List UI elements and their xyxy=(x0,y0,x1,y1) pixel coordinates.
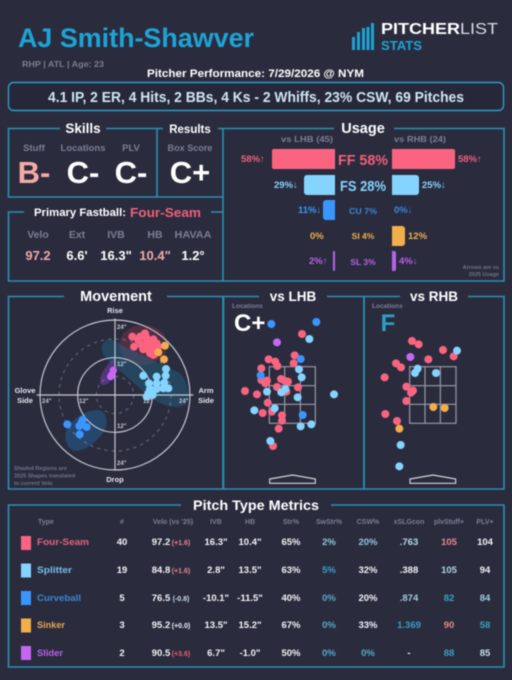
heading: skills: Skills xyxy=(65,121,101,136)
usage row: splitter: 25%↓ xyxy=(422,180,446,191)
row: curveball: 40% xyxy=(281,593,301,604)
row: curveball: 0% xyxy=(322,593,336,604)
sinker dots xyxy=(154,342,169,363)
usage row: four-seam: 58%↑ xyxy=(458,154,482,165)
label: box score grade: Box Score xyxy=(168,143,212,154)
row: sinker: 58 xyxy=(480,620,490,631)
distance tick labels: 12" xyxy=(143,399,153,405)
four-seam locations xyxy=(381,337,458,425)
row: sinker: 33% xyxy=(358,620,378,631)
axis labels xyxy=(15,306,214,484)
row: sinker: 90 xyxy=(444,620,454,631)
usage row: sinker: 0% xyxy=(310,231,324,242)
label: box score grade: C+ xyxy=(170,155,210,190)
row: four-seam: 97.2 xyxy=(152,537,170,548)
note: shaded regions: to current Velo xyxy=(14,481,53,487)
table header: SwStr% xyxy=(316,519,343,526)
label: box score grade xyxy=(168,143,212,190)
row: splitter: 13.5" xyxy=(238,565,262,576)
panel: usage xyxy=(223,121,504,281)
row: four-seam: (+1.6) xyxy=(172,540,190,547)
table header: xSLGcon xyxy=(394,519,424,526)
fastball metric values: 1.2° xyxy=(181,248,205,263)
distance tick labels: 12" xyxy=(117,362,127,368)
axis labels: Arm xyxy=(198,386,214,395)
row: sinker: 15.2" xyxy=(238,620,262,631)
panel: vs RHB locations xyxy=(364,289,504,489)
panel: stat line xyxy=(8,82,504,110)
row: curveball: -10.1" xyxy=(203,593,229,604)
heading: primary fastball xyxy=(34,206,201,220)
usage row: curveball xyxy=(298,200,412,220)
logo: Pitcher List Stats: LIST xyxy=(460,21,499,38)
fastball metric values: 97.2 xyxy=(25,248,51,263)
row: splitter: 84.8 xyxy=(152,565,170,576)
row: curveball: 20% xyxy=(358,593,378,604)
logo: Pitcher List Stats: PITCHER xyxy=(381,21,460,38)
pitcher details: RHP | ATL | Age: 23 xyxy=(22,59,104,69)
row: slider: 2 xyxy=(119,648,125,659)
splitter dots xyxy=(139,365,172,401)
row: splitter: 2.8" xyxy=(207,565,225,576)
distance tick labels: 12" xyxy=(79,399,89,405)
axis labels: Side xyxy=(17,396,33,405)
row: sinker: 0% xyxy=(322,620,336,631)
row: slider: Slider xyxy=(37,648,63,659)
row: slider: - xyxy=(407,648,411,659)
row: four-seam: .763 xyxy=(400,537,418,548)
distance tick labels: 24" xyxy=(117,461,127,467)
note: arrows explanation: Arrows are vs xyxy=(463,265,499,271)
four-seam dots xyxy=(128,329,162,359)
movement chart xyxy=(37,318,193,470)
row: sinker: 1.369 xyxy=(397,620,421,631)
row: curveball: 5 xyxy=(119,593,125,604)
chart rings and axes xyxy=(37,318,193,470)
axis labels: Drop xyxy=(106,475,124,484)
shaded regions xyxy=(65,325,189,451)
heading: game line: Pitcher Performance: 7/29/2026 @ NYM xyxy=(147,68,364,80)
usage row: splitter: 29%↓ xyxy=(274,180,298,191)
table header: # xyxy=(120,519,124,526)
curveball locations xyxy=(257,318,320,419)
row: slider: 88 xyxy=(444,648,454,659)
fastball metric labels: IVB xyxy=(107,229,125,241)
label: PLV grade: C- xyxy=(115,155,147,190)
home plate xyxy=(410,475,456,483)
row: curveball: 76.5 xyxy=(152,593,171,604)
row: sinker: (+0.0) xyxy=(172,623,190,630)
label: stuff grade: B- xyxy=(18,155,50,190)
table header xyxy=(38,519,494,526)
row: sinker: 95.2 xyxy=(152,620,170,631)
heading: vs LHB: vs LHB xyxy=(270,289,317,304)
row: curveball: 82 xyxy=(444,593,454,604)
usage row: curveball: 11%↓ xyxy=(298,205,321,216)
row: sinker: 67% xyxy=(281,620,301,631)
row: curveball: 84 xyxy=(480,593,491,604)
row: splitter: 32% xyxy=(358,565,378,576)
fastball metric labels xyxy=(27,229,212,241)
table header: Velo (vs '25) xyxy=(153,519,193,526)
fastball metric labels: Velo xyxy=(27,229,49,241)
slider location xyxy=(406,353,414,361)
usage row: curveball: 0%↓ xyxy=(394,205,412,216)
note: arrows explanation xyxy=(463,265,499,278)
row: sinker: 3 xyxy=(119,620,125,631)
row: splitter: Splitter xyxy=(37,565,72,576)
table header: Str% xyxy=(283,519,300,526)
row: four-seam: 20% xyxy=(358,537,378,548)
usage row: slider: 2%↑ xyxy=(309,256,327,267)
axis labels: Side xyxy=(198,396,214,405)
strike zone grid xyxy=(410,367,456,423)
note: shaded regions xyxy=(14,466,75,487)
distance tick labels: 24" xyxy=(179,399,189,405)
axis labels: Glove xyxy=(15,386,35,395)
locations label: Locations xyxy=(372,303,403,310)
locations grade: C+ xyxy=(234,310,265,337)
panel: primary fastball xyxy=(8,206,223,281)
fastball metric values: 10.4" xyxy=(139,248,171,263)
note: shaded regions: 2025 Shapes translated xyxy=(14,474,75,480)
panel: vs LHB locations xyxy=(224,289,364,489)
heading: usage: Usage xyxy=(341,121,385,137)
row: slider: 0% xyxy=(322,648,336,659)
row: slider: 50% xyxy=(281,648,301,659)
usage row: curveball: CU 7% xyxy=(349,206,377,216)
panel: movement xyxy=(8,289,223,489)
heading: results: Results xyxy=(169,124,211,136)
strike zone plot xyxy=(241,318,338,483)
row: splitter: 5% xyxy=(322,565,336,576)
row: splitter: 19 xyxy=(117,565,127,576)
row: curveball: .874 xyxy=(400,593,419,604)
row: curveball xyxy=(21,591,491,605)
panel: skills and results xyxy=(8,121,223,197)
distance tick labels: 24" xyxy=(42,399,52,405)
row: splitter: 105 xyxy=(441,565,458,576)
table header: plvStuff+ xyxy=(434,519,464,526)
fastball metric labels: HB xyxy=(147,229,163,241)
row: four-seam: 16.3" xyxy=(204,537,228,548)
slider dots xyxy=(107,367,117,380)
row: curveball: -11.5" xyxy=(237,593,263,604)
table header: IVB xyxy=(210,519,222,526)
heading: vs RHB: vs RHB xyxy=(410,289,458,304)
sinker locations xyxy=(395,403,449,433)
row: splitter: .388 xyxy=(400,565,418,576)
row: four-seam: 105 xyxy=(441,537,458,548)
heading: movement: Movement xyxy=(80,289,152,305)
usage row: four-seam: 58%↑ xyxy=(241,154,265,165)
row: slider: 90.5 xyxy=(152,648,171,659)
row: four-seam: 10.4" xyxy=(238,537,262,548)
fastball metric labels: HAVAA xyxy=(174,229,212,241)
splitter locations xyxy=(395,347,461,470)
fastball metric labels: Ext xyxy=(69,229,86,241)
distance tick labels xyxy=(42,325,189,467)
fastball metric values: 6.6' xyxy=(66,248,88,263)
locations label: Locations xyxy=(232,303,263,310)
label: PLV grade: PLV xyxy=(122,143,141,154)
row: sinker: Sinker xyxy=(37,620,65,631)
panel: pitch type metrics xyxy=(8,497,504,667)
distance tick labels: 12" xyxy=(117,424,127,430)
row: slider: 85 xyxy=(480,648,491,659)
row: four-seam: 65% xyxy=(281,537,301,548)
table header: CSW% xyxy=(357,519,380,526)
locations grade: F xyxy=(381,310,395,337)
table header: PLV+ xyxy=(476,519,494,526)
usage row: slider xyxy=(309,251,417,271)
four-seam locations xyxy=(241,330,306,450)
label: stuff grade: Stuff xyxy=(23,143,46,154)
label: locations grade: C- xyxy=(67,155,99,190)
distance tick labels: 24" xyxy=(117,325,127,331)
row: curveball: (-0.8) xyxy=(173,596,189,603)
usage row: slider: SL 3% xyxy=(350,257,376,267)
heading: pitch type metrics: Pitch Type Metrics xyxy=(193,497,319,513)
fastball metric values: 16.3" xyxy=(100,248,132,263)
row: sinker xyxy=(21,618,490,632)
heading: primary fastball: Four-Seam xyxy=(130,206,201,220)
table header: Type xyxy=(38,519,54,526)
fastball metric values xyxy=(25,248,205,263)
row: slider: 6.7" xyxy=(207,648,225,659)
usage row: sinker: SI 4% xyxy=(352,231,375,241)
usage row: splitter: FS 28% xyxy=(340,178,386,195)
row: four-seam xyxy=(21,536,494,550)
row: four-seam: 2% xyxy=(322,537,336,548)
table header: HB xyxy=(245,519,255,526)
heading: primary fastball: Primary Fastball: xyxy=(34,207,126,219)
axis labels: Rise xyxy=(107,306,123,315)
usage row: four-seam xyxy=(241,149,482,169)
row: slider: -1.0" xyxy=(240,648,260,659)
row: splitter xyxy=(21,564,491,578)
row: slider: 0% xyxy=(361,648,375,659)
row: four-seam: 40 xyxy=(117,537,127,548)
note: arrows explanation: 2025 Usage xyxy=(469,272,499,278)
usage row: four-seam: FF 58% xyxy=(338,152,388,169)
usage row: sinker: 12% xyxy=(408,231,428,242)
title: pitcher name: AJ Smith-Shawver xyxy=(18,23,254,53)
slider location xyxy=(273,338,281,346)
row: four-seam: 104 xyxy=(477,537,494,548)
strike zone plot xyxy=(381,337,461,483)
row: four-seam: Four-Seam xyxy=(37,537,89,548)
usage row: slider: 4%↓ xyxy=(399,256,417,267)
note: shaded regions: Shaded Regions are xyxy=(14,466,67,472)
label: locations grade: Locations xyxy=(60,143,106,153)
row: sinker: 13.5" xyxy=(204,620,228,631)
usage row: splitter xyxy=(274,175,446,195)
home plate xyxy=(270,475,315,483)
usage row: sinker xyxy=(310,226,428,246)
row: splitter: (+1.6) xyxy=(172,568,190,575)
row: slider: (+3.6) xyxy=(172,651,190,658)
panel: stat line: 4.1 IP, 2 ER, 4 Hits, 2 BBs, 4 Ks - 2 Whiffs, 23% CSW, 69 Pitches xyxy=(48,90,464,106)
label: vs LHB count: vs LHB (45) xyxy=(281,134,333,144)
label: locations grade xyxy=(60,143,106,190)
row: splitter: 94 xyxy=(480,565,491,576)
logo: Pitcher List Stats xyxy=(352,21,499,53)
strike zone grid xyxy=(269,367,315,423)
row: curveball: Curveball xyxy=(37,593,81,604)
splitter locations xyxy=(250,335,338,445)
row: splitter: 63% xyxy=(281,565,301,576)
row: slider xyxy=(21,646,491,660)
logo: Pitcher List Stats: STATS xyxy=(381,39,422,53)
curveball dots xyxy=(63,416,91,438)
label: vs RHB count: vs RHB (24) xyxy=(394,134,446,144)
